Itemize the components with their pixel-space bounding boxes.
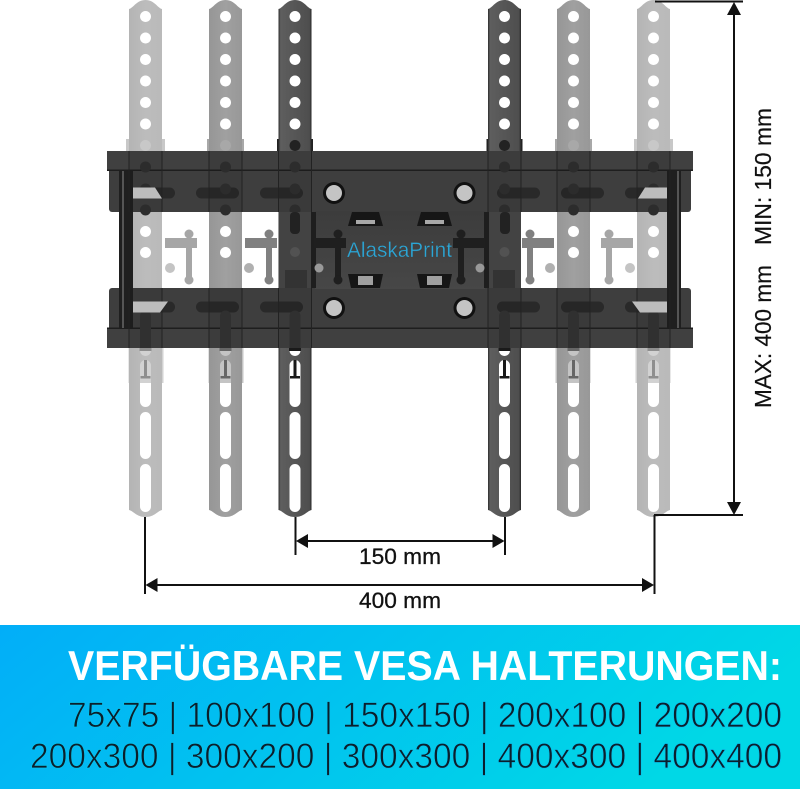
bracket shading over rails <box>128 151 670 348</box>
tee bolt inner left <box>314 230 346 284</box>
bolt top left <box>323 182 345 204</box>
hinge left <box>279 212 316 288</box>
tee bolts left middle <box>244 230 277 284</box>
bolt top right <box>454 182 476 204</box>
bracket dark left (150 mm position) <box>277 0 313 517</box>
dimension: 150 mm horizontal <box>296 517 505 569</box>
center plate <box>315 211 485 289</box>
tee bolts left <box>165 230 197 284</box>
plate cutouts <box>348 212 452 288</box>
tee bolts right middle <box>522 230 555 284</box>
side rail right <box>667 171 681 328</box>
bracket far left (faded, 400 mm position) <box>126 0 165 517</box>
top rail <box>107 151 693 212</box>
white cutouts at rail ends <box>133 188 667 312</box>
dimension: vertical height: MAX: 400 mm <box>750 265 776 408</box>
bracket left middle (faded) <box>207 0 244 517</box>
VESA sizes row 1: 75x75 | 100x100 | 150x150 | 200x100 | 200x200 <box>68 696 782 735</box>
brand logo text: AlaskaPrint <box>347 239 452 262</box>
bracket far right (faded, 400 mm position) <box>634 0 673 517</box>
bracket right middle (faded) <box>555 0 592 517</box>
dimension: 400 mm horizontal: 400 mm <box>359 588 441 613</box>
dimension: 400 mm horizontal <box>145 515 654 613</box>
dimension: 150 mm horizontal: 150 mm <box>359 544 441 569</box>
bracket dark right (150 mm position) <box>486 0 522 517</box>
VESA sizes row 2: 200x300 | 300x200 | 300x300 | 400x300 | 400x400 <box>30 737 782 776</box>
frame bolts <box>323 182 476 319</box>
faded mounting hardware <box>165 230 635 284</box>
dimension: vertical height: MIN: 150 mm <box>750 108 776 245</box>
wall mount frame <box>107 151 693 348</box>
tee bolt inner right <box>453 230 485 284</box>
tee bolts right <box>601 230 635 284</box>
slots top <box>150 188 650 198</box>
bolt bottom right <box>454 297 476 319</box>
bottom rail <box>107 288 693 348</box>
hinge right <box>484 212 521 288</box>
footer band <box>0 625 800 789</box>
dimension: vertical height <box>654 2 776 515</box>
side rail left <box>119 171 133 328</box>
bolt bottom left <box>323 297 345 319</box>
adjustable brackets: VESA positions <box>126 0 673 517</box>
center hinge blocks <box>279 212 521 288</box>
slots bottom <box>150 302 650 312</box>
